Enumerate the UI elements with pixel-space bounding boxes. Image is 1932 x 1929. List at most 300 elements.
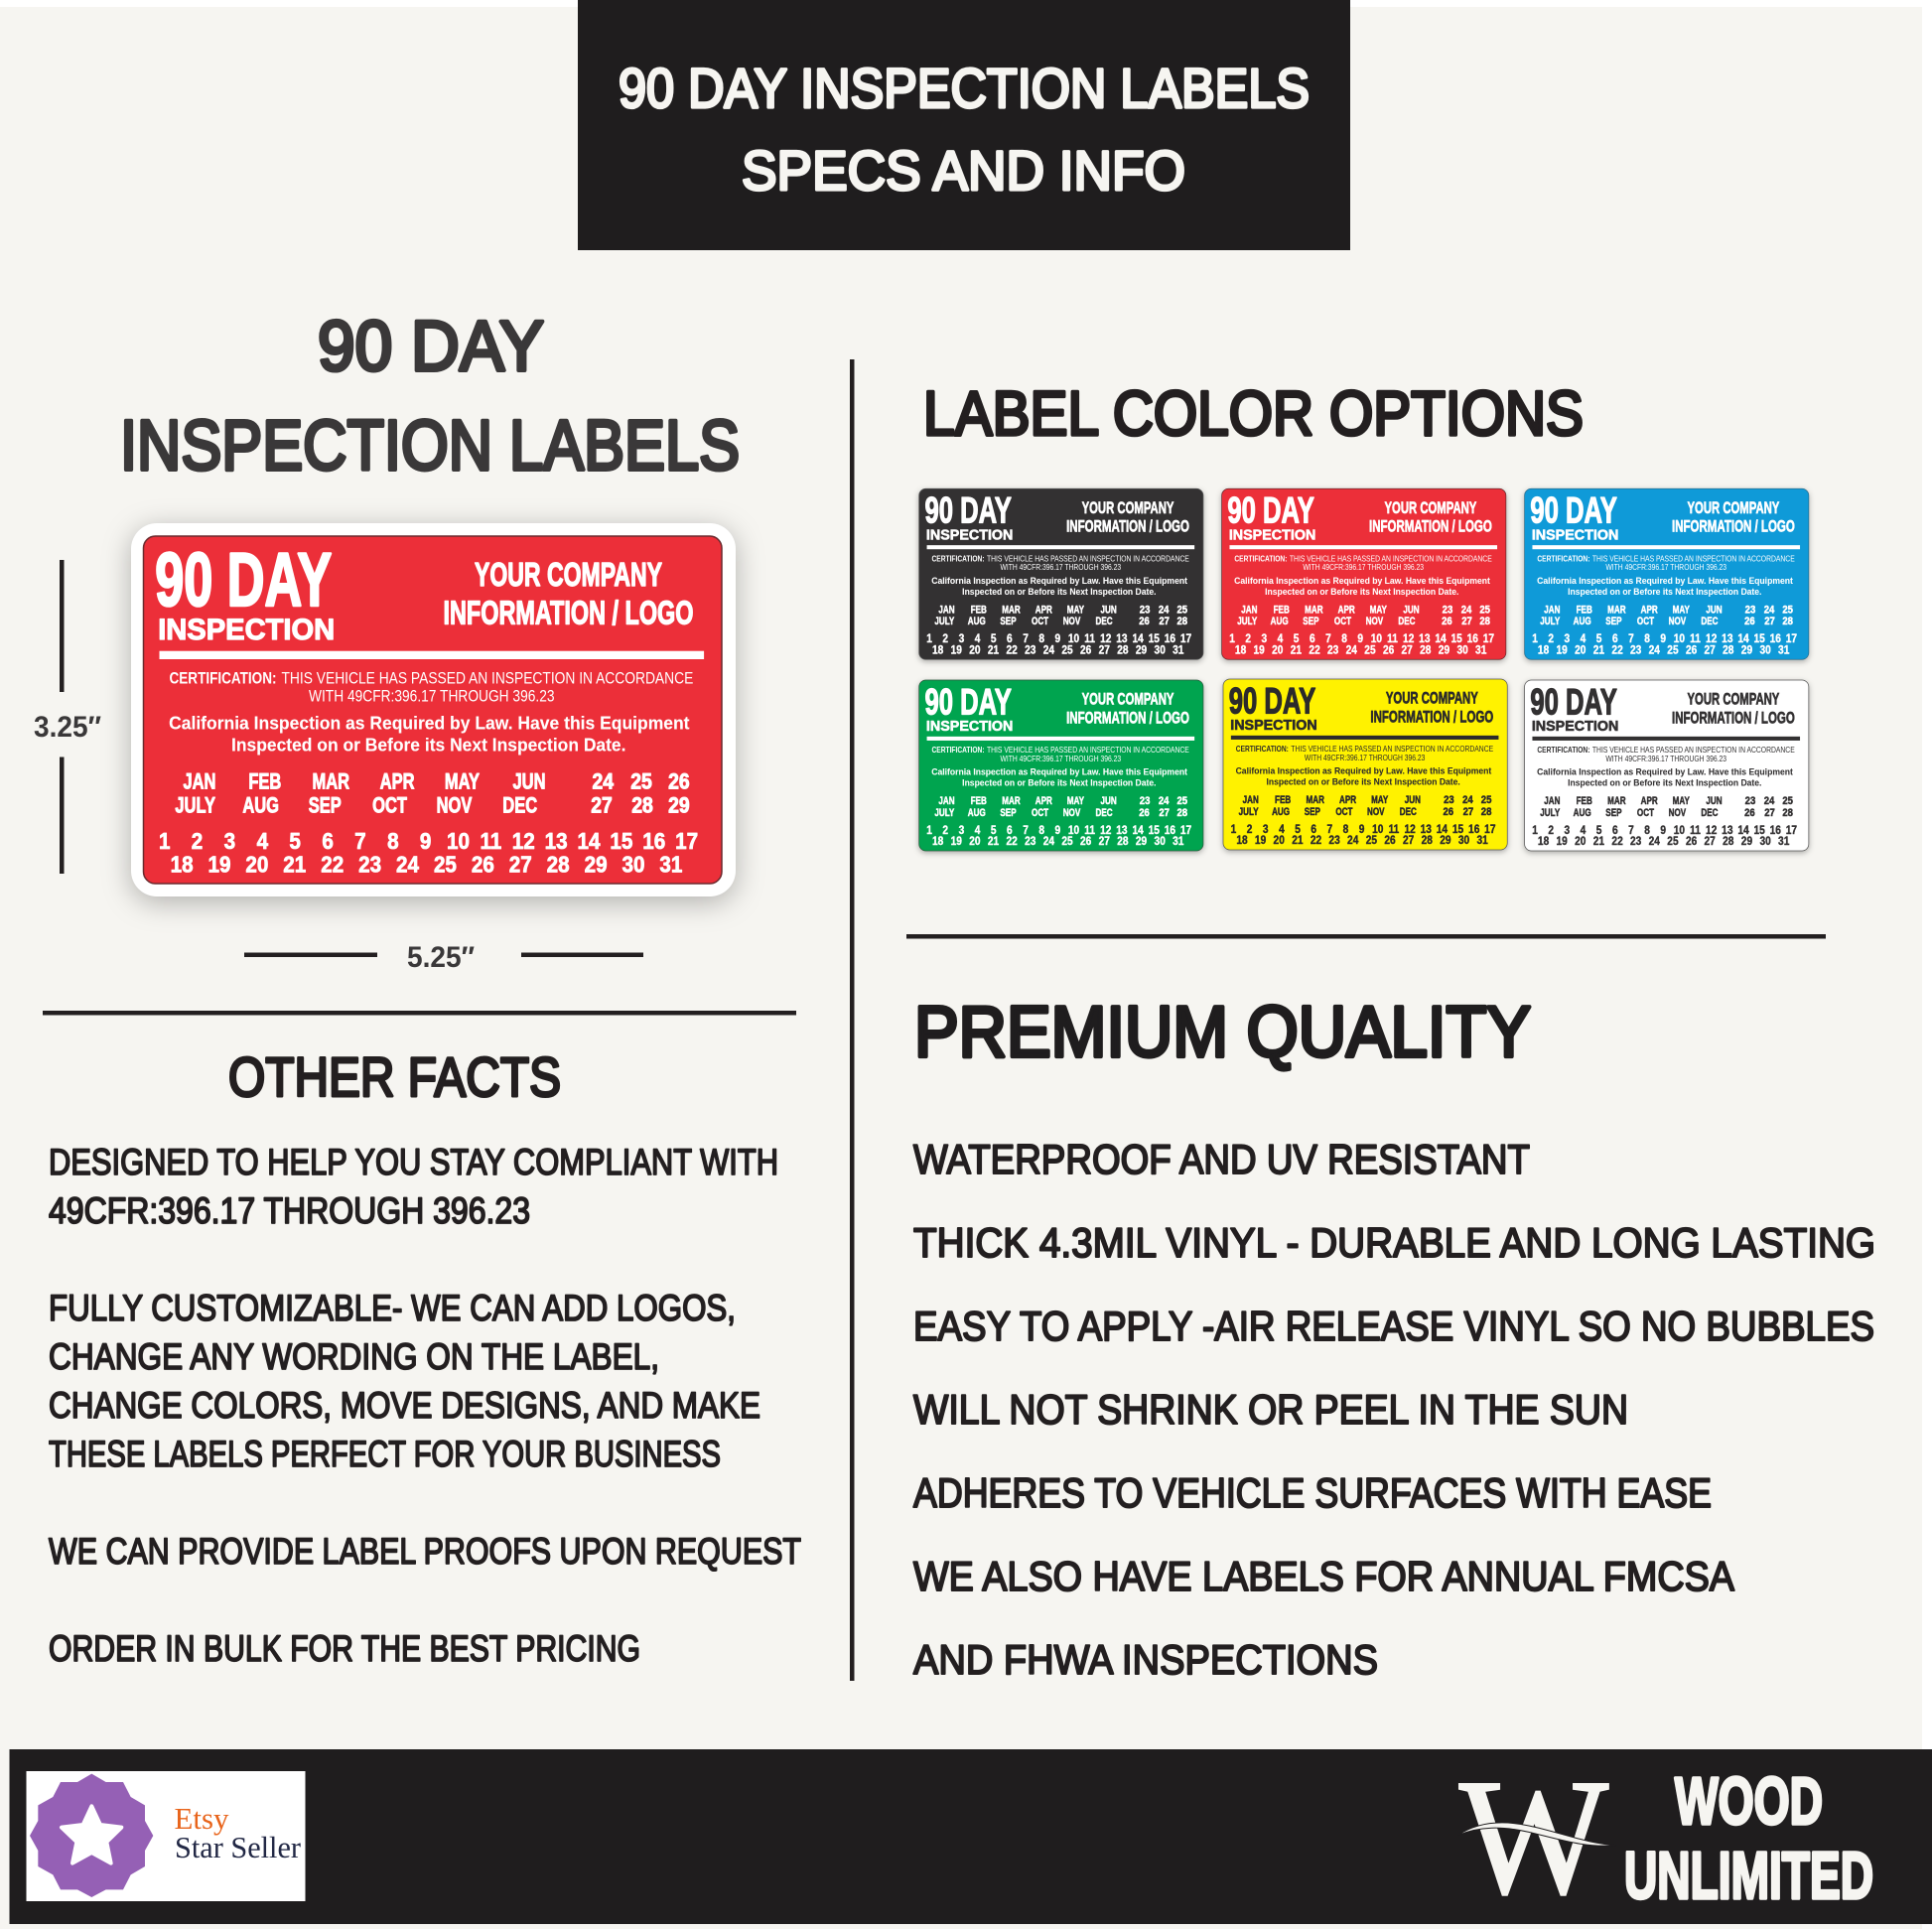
label option: white: 26 [1744,807,1755,819]
label option: yellow: 8 [1343,823,1348,836]
label option: white: California Inspection as Required by Law. Have this Equipment [1537,767,1793,777]
label option: blue: 3 [1564,633,1570,645]
label option: yellow: 28 [1422,835,1433,847]
label option: yellow: 20 [1274,835,1285,847]
large red label with white sticker border [131,523,736,896]
label option: red: 13 [1419,633,1430,645]
text block: other facts: CHANGE ANY WORDING ON THE LABEL, [49,1335,659,1377]
large red label with white sticker border: NOV [437,793,472,818]
label option: black: 28 [1117,644,1129,657]
label option: red: 11 [1387,633,1398,645]
label option: yellow: YOUR COMPANY [1386,690,1478,708]
label option: yellow: 7 [1327,823,1332,836]
label option: blue: 5 [1596,633,1601,645]
label option: yellow: 21 [1292,835,1304,847]
label option: white: 1 [1532,824,1538,837]
label option: white: MAY [1673,795,1690,807]
label option: black: CERTIFICATION: [931,554,985,563]
label option: yellow: 26 [1384,835,1396,847]
text block: premium quality list: ADHERES TO VEHICLE SURFACES WITH EASE [913,1469,1712,1516]
label option: blue: 16 [1770,633,1781,645]
label option: black: 7 [1023,633,1029,645]
label option: white: 25 [1782,796,1793,807]
label option: red: 29 [1439,644,1449,657]
label option: green: INFORMATION / LOGO [1066,709,1189,727]
label option: black: SEP [1000,616,1017,627]
label option: green: 17 [1180,824,1191,837]
label option: red: 28 [1420,644,1431,657]
label option: red: 19 [1254,644,1265,657]
label option: black: 26 [1080,644,1091,657]
text block: other facts [49,1141,801,1669]
label option: white: 31 [1778,836,1789,848]
label option: red: 22 [1309,644,1320,657]
large red label with white sticker border: 3 [224,828,235,854]
label option: yellow: 18 [1236,835,1248,847]
label option: yellow: 3 [1263,823,1269,836]
label option: yellow: MAR [1307,794,1324,806]
label option: blue: 14 [1737,633,1749,645]
etsy star seller badge [26,1771,306,1901]
heading: label color options: LABEL COLOR OPTIONS [923,379,1584,449]
label option: yellow: 16 [1468,823,1479,836]
label option: blue: 4 [1581,633,1586,645]
label option: green: 22 [1007,836,1018,848]
label option: green: 4 [975,824,980,837]
label option: green: 23 [1140,796,1151,807]
label option: white: Inspected on or Before its Next Inspection Date. [1568,777,1761,787]
label option: red: 8 [1341,633,1347,645]
label option: green: 20 [969,836,981,848]
label option: white: 27 [1764,807,1775,819]
large red label with white sticker border: JAN [183,769,215,794]
label option: green: 28 [1176,807,1187,819]
label option: blue: INFORMATION / LOGO [1672,518,1795,536]
label option: yellow: OCT [1335,806,1353,818]
label option: green: DEC [1095,807,1113,819]
label option: yellow: SEP [1305,806,1320,818]
label option: blue: 27 [1705,644,1716,657]
label option: red: 2 [1245,633,1251,645]
label option: green: 28 [1117,836,1129,848]
large red label with white sticker border: 27 [591,793,613,818]
large red label with white sticker border: AUG [242,793,279,818]
label option: black: 21 [988,644,999,657]
label option: green: Inspected on or Before its Next Inspection Date. [962,777,1157,787]
large red label with white sticker border: 14 [578,828,601,854]
label option: yellow: 28 [1481,806,1492,818]
label option: yellow: 26 [1444,806,1453,818]
large red label with white sticker border: 24 [592,769,614,794]
label option: black: 4 [975,633,980,645]
label option: green: JULY [934,807,955,819]
label option: blue: JAN [1544,604,1561,617]
label option: black: 23 [1025,644,1035,657]
large red label with white sticker border: 8 [387,828,399,854]
label option: black: 24 [1159,605,1170,617]
label option: black: 11 [1084,633,1095,645]
label option: white: 16 [1770,824,1781,837]
label option: yellow: 30 [1458,835,1469,847]
large red label with white sticker border: 26 [472,851,494,878]
large red label with white sticker border: 16 [642,828,665,854]
label option: black: 28 [1176,617,1187,627]
label option: blue: 21 [1593,644,1604,657]
label option: black: NOV [1063,616,1081,627]
label option: yellow: 25 [1481,795,1492,806]
label option: red: 21 [1291,644,1302,657]
label option: yellow: Inspected on or Before its Next Inspection Date. [1266,776,1460,786]
label option: green: 31 [1173,836,1183,848]
label option: yellow: 1 [1231,823,1236,836]
label option: yellow: JUN [1405,794,1421,806]
large red label with white sticker border: 30 [622,851,645,878]
label option: white: 8 [1644,824,1650,837]
label option: red: DEC [1398,616,1416,627]
label option: red: SEP [1303,616,1319,627]
label option: white: 19 [1557,836,1568,848]
label option: blue: CERTIFICATION: [1537,554,1589,563]
label option: white: 30 [1759,836,1771,848]
label option: black: 16 [1165,633,1175,645]
label option: blue: 19 [1557,644,1568,657]
label option: black: AUG [968,616,986,627]
label option: blue: WITH 49CFR:396.17 THROUGH 396.23 [1605,563,1726,572]
label option: red: MAR [1305,604,1323,617]
label option: red: CERTIFICATION: [1234,554,1287,563]
label option: white: 28 [1723,836,1733,848]
wood unlimited logo: W [1459,1745,1608,1928]
text block: premium quality list: THICK 4.3MIL VINYL - DURABLE AND LONG LASTING [913,1219,1875,1266]
footer bar [10,1745,1932,1928]
heading: premium quality: PREMIUM QUALITY [914,993,1531,1072]
label option: yellow: 31 [1476,835,1488,847]
label option: green: 18 [932,836,943,848]
label option: white: CERTIFICATION: [1537,746,1589,755]
label option: green: THIS VEHICLE HAS PASSED AN INSPECTION IN ACCORDANCE [987,746,1189,755]
label option: white: 5 [1596,824,1601,837]
label option: red: 27 [1402,644,1413,657]
large red label with white sticker border: 12 [512,828,535,854]
label option: blue: 29 [1741,644,1752,657]
label option: yellow: WITH 49CFR:396.17 THROUGH 396.23 [1305,754,1426,762]
label option: red: THIS VEHICLE HAS PASSED AN INSPECTION IN ACCORDANCE [1290,554,1492,563]
large red label with white sticker border: California Inspection as Required by Law. Have this Equipment [169,713,690,734]
label option: yellow: 15 [1452,823,1463,836]
label option: green: 23 [1025,836,1035,848]
large red label with white sticker border: JULY [175,793,215,818]
label option: blue: 8 [1644,633,1650,645]
label option: white: 29 [1741,836,1752,848]
label option: blue: California Inspection as Required by Law. Have this Equipment [1537,576,1793,586]
text block: premium quality list: WE ALSO HAVE LABELS FOR ANNUAL FMCSA [913,1553,1734,1599]
text block: premium quality list: AND FHWA INSPECTIONS [913,1636,1378,1683]
label option: yellow: 23 [1328,835,1340,847]
label option: white: 4 [1581,824,1586,837]
label option: yellow: 10 [1372,823,1383,836]
label option: white [1525,680,1809,851]
label option: blue: 11 [1690,633,1701,645]
label option: yellow: JULY [1239,806,1259,818]
label option: blue: 31 [1778,644,1789,657]
large red label with white sticker border: MAR [312,769,349,794]
label option: blue: AUG [1574,616,1591,627]
label option: green [919,680,1203,851]
large red label with white sticker border: 28 [631,793,653,818]
label option: green: 5 [991,824,997,837]
label option: yellow: CERTIFICATION: [1236,745,1289,754]
label option: white: 24 [1649,836,1660,848]
label option: red: 23 [1443,605,1453,617]
label option: yellow: 5 [1295,823,1301,836]
label option: blue: 1 [1532,633,1538,645]
label option: black: JULY [934,616,955,627]
label option: green: 10 [1068,824,1079,837]
label option: red: JULY [1237,616,1258,627]
large red label with white sticker border: 28 [547,851,570,878]
label option: blue: 90 DAY [1530,489,1617,531]
large red label with white sticker border: 1 [159,828,170,854]
label option: black: 25 [1176,605,1187,617]
large red label with white sticker border: 10 [447,828,470,854]
label option: yellow: 11 [1389,823,1399,836]
large red label with white sticker border: CERTIFICATION: [169,669,276,688]
heading: other facts: OTHER FACTS [228,1045,561,1108]
label option: yellow: MAY [1371,794,1389,806]
label option: red: 16 [1467,633,1478,645]
label option: black: 22 [1007,644,1018,657]
large red label with white sticker border: 90 DAY [155,538,332,622]
label option: blue: JUN [1706,604,1723,617]
label option: blue: NOV [1669,616,1687,627]
label option: black: 8 [1038,633,1044,645]
large red label with white sticker border: 9 [420,828,431,854]
label option: blue: 26 [1744,617,1755,627]
label option: green: 27 [1159,807,1170,819]
label option: red: 31 [1475,644,1486,657]
label option: yellow: 27 [1403,835,1414,847]
label option: white: INFORMATION / LOGO [1672,709,1795,727]
label option: green: AUG [968,807,986,819]
large red label with white sticker border: THIS VEHICLE HAS PASSED AN INSPECTION IN ACCORDANCE [282,669,693,688]
large red label with white sticker border: 18 [171,851,194,878]
label option: yellow: 23 [1444,795,1454,806]
label option: red: 27 [1461,617,1472,627]
label option: white: FEB [1577,795,1592,807]
label option: blue: 17 [1786,633,1797,645]
text block: premium quality list: WATERPROOF AND UV RESISTANT [913,1136,1530,1182]
label option: red: 20 [1272,644,1283,657]
label option: green: 27 [1099,836,1110,848]
label option: blue: 9 [1660,633,1666,645]
label option: black: 29 [1136,644,1147,657]
label option: white: JAN [1544,795,1561,807]
large red label with white sticker border: 11 [480,828,501,854]
label option: white: 15 [1753,824,1765,837]
label option: blue: APR [1641,604,1658,617]
large red label with white sticker border: 21 [283,851,306,878]
large red label with white sticker border: 29 [585,851,608,878]
label option: black: 24 [1043,644,1054,657]
label option: black: APR [1035,604,1052,617]
large red label with white sticker border: YOUR COMPANY [475,557,662,594]
label option: black: YOUR COMPANY [1082,499,1173,517]
width dimension 5.25 inches: 5.25″ [407,941,475,974]
large red label with white sticker border: 24 [396,851,420,878]
label option: green: 16 [1165,824,1175,837]
large red label with white sticker border: 5 [289,828,301,854]
label option: yellow: 14 [1437,823,1448,836]
label option: red: 15 [1450,633,1462,645]
label option: blue: 6 [1612,633,1618,645]
label option: black: 27 [1159,617,1170,627]
label option: yellow: INSPECTION [1230,718,1317,734]
label option: green: 30 [1155,836,1166,848]
label option: green: 7 [1023,824,1029,837]
large red label with white sticker border: OCT [372,793,407,818]
height dimension 3.25 inches [34,560,101,874]
label option: red: 18 [1235,644,1246,657]
label option: black: Inspected on or Before its Next Inspection Date. [962,587,1157,597]
label option: black: 20 [969,644,981,657]
label option: yellow: 12 [1404,823,1416,836]
label option: white: JUN [1706,795,1723,807]
label option: red: 1 [1229,633,1235,645]
label option: white: 6 [1612,824,1618,837]
large red label with white sticker border: 15 [610,828,632,854]
large red label with white sticker border: DEC [502,793,537,818]
label option: black: 26 [1139,617,1150,627]
label option: white: THIS VEHICLE HAS PASSED AN INSPECTION IN ACCORDANCE [1592,746,1795,755]
text block: other facts: 49CFR:396.17 THROUGH 396.23 [49,1189,530,1231]
label option: blue: 12 [1706,633,1717,645]
label option: red: 4 [1278,633,1283,645]
label option: green: SEP [1000,807,1017,819]
wood unlimited logo [1457,1745,1873,1928]
label option: white: AUG [1574,807,1591,819]
label option: green: 26 [1080,836,1091,848]
large red label with white sticker border: WITH 49CFR:396.17 THROUGH 396.23 [309,687,554,706]
label option: white: 18 [1538,836,1549,848]
label option: yellow: 6 [1311,823,1316,836]
label option: red: JAN [1241,604,1258,617]
label option: red: 5 [1294,633,1299,645]
label option: blue: THIS VEHICLE HAS PASSED AN INSPECTION IN ACCORDANCE [1592,554,1795,563]
label option: blue: Inspected on or Before its Next Inspection Date. [1568,587,1761,597]
label option: red: 23 [1327,644,1338,657]
label option: black: JAN [938,604,955,617]
label option: white: 11 [1690,824,1701,837]
label option: red: 3 [1261,633,1267,645]
large red label with white sticker border: 17 [675,828,698,854]
label option: red: 12 [1403,633,1414,645]
label option: green: 14 [1132,824,1144,837]
label option: yellow: 13 [1421,823,1432,836]
label option: white: 27 [1705,836,1716,848]
label option: blue: OCT [1637,616,1654,627]
label option: red: 28 [1479,617,1490,627]
label option: red: OCT [1334,616,1351,627]
large red label with white sticker border: APR [380,769,415,794]
label option: black: 10 [1068,633,1079,645]
label option: blue: SEP [1605,616,1622,627]
label option: yellow: 19 [1255,835,1266,847]
large red label with white sticker border: INSPECTION [158,614,335,646]
label option: black: INSPECTION [926,527,1013,543]
label option: blue: 22 [1611,644,1623,657]
label option: black: California Inspection as Required by Law. Have this Equipment [931,576,1187,586]
label option: black [919,488,1203,659]
label option: red: 10 [1371,633,1382,645]
label option: white: INSPECTION [1532,719,1618,735]
label option: white: 22 [1611,836,1623,848]
label option: blue: 20 [1575,644,1586,657]
label option: green: JAN [938,795,955,807]
label option: black: 6 [1007,633,1013,645]
label option: red [1222,488,1506,659]
label option: yellow: AUG [1272,806,1290,818]
label option: red: 26 [1442,617,1452,627]
label option: red: 26 [1383,644,1394,657]
large red label with white sticker border: 7 [354,828,366,854]
label option: black: DEC [1095,616,1113,627]
label option: green: INSPECTION [926,719,1013,735]
label option: red: 9 [1357,633,1363,645]
label option: red: 24 [1346,644,1357,657]
large red label with white sticker border: 23 [358,851,381,878]
label option: blue: JULY [1540,616,1561,627]
label option: white: 3 [1564,824,1570,837]
label option: green: 25 [1061,836,1073,848]
label option: blue: 7 [1628,633,1634,645]
label option: yellow: 17 [1484,823,1495,836]
label option: green: 8 [1038,824,1044,837]
label option: blue: DEC [1701,616,1719,627]
label option: yellow: JAN [1243,794,1259,806]
label option: green: YOUR COMPANY [1082,691,1173,709]
label option: green: California Inspection as Required by Law. Have this Equipment [931,767,1187,777]
heading: 90 day inspection labels [120,308,740,485]
label option: red: 25 [1479,605,1490,617]
label option: white: 10 [1674,824,1685,837]
label option: green: 11 [1084,824,1095,837]
label option: green: CERTIFICATION: [931,746,985,755]
label option: white: 28 [1782,807,1793,819]
label option: red: California Inspection as Required by Law. Have this Equipment [1234,576,1490,586]
label option: red: 30 [1456,644,1468,657]
label option: black: 30 [1155,644,1166,657]
large red label with white sticker border: 29 [668,793,690,818]
width dimension 5.25 inches [244,941,643,974]
label option: white: 23 [1630,836,1641,848]
text block: premium quality list [913,1136,1875,1683]
label option: green: 2 [942,824,948,837]
label option: yellow: 24 [1347,835,1358,847]
label option: yellow: California Inspection as Required by Law. Have this Equipment [1236,766,1491,776]
label option: black: 1 [926,633,932,645]
text block: premium quality list: WILL NOT SHRINK OR PEEL IN THE SUN [913,1386,1628,1433]
label option: white: MAR [1607,795,1626,807]
title banner: SPECS AND INFO [742,139,1185,202]
label option: white: 20 [1575,836,1586,848]
label option: red: Inspected on or Before its Next Inspection Date. [1265,587,1458,597]
label option: green: WITH 49CFR:396.17 THROUGH 396.23 [1001,755,1122,763]
label option: white: 21 [1593,836,1604,848]
label option: blue: 24 [1649,644,1660,657]
label option: blue: MAR [1607,604,1626,617]
large red label with white sticker border: INFORMATION / LOGO [443,595,693,631]
label option: black: MAR [1002,604,1021,617]
